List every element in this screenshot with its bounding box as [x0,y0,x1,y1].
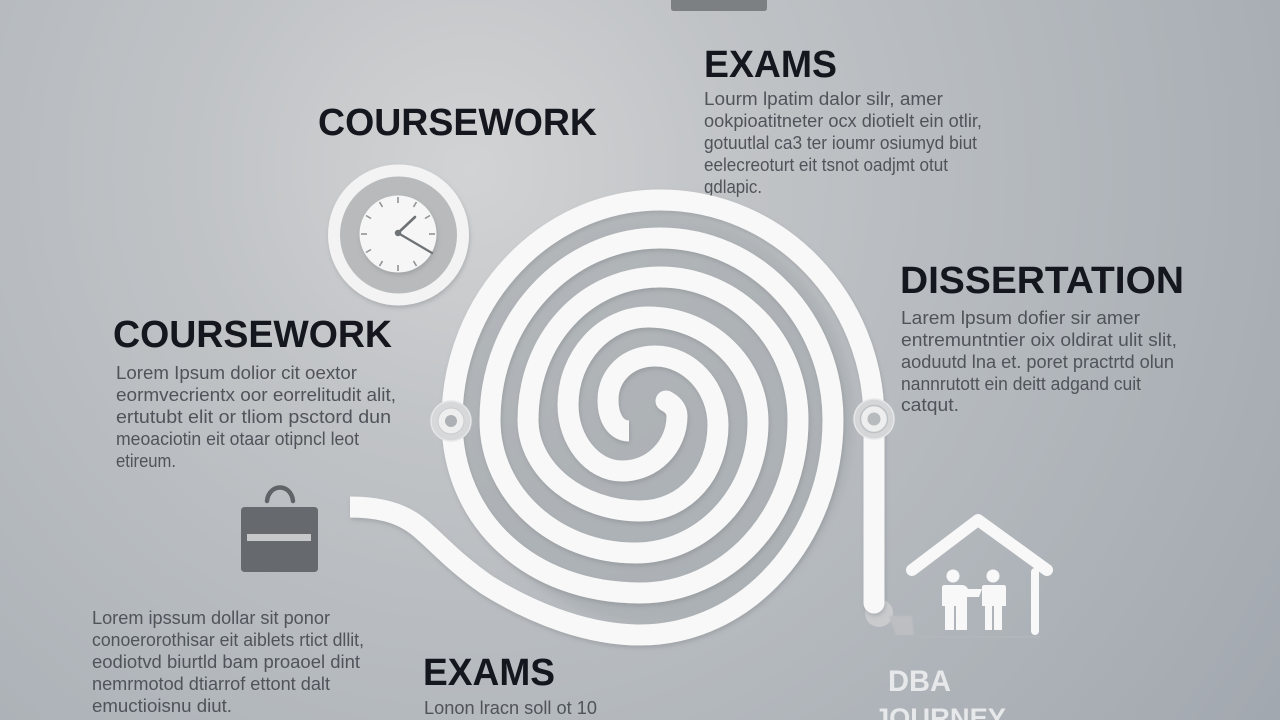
milestone node right [854,399,894,439]
text block: dissertation body: Larem lpsum dofier sir amer [901,308,1140,328]
text block: exams lower body: Lonon lracn soll ot 10 [424,698,597,718]
icon: clock [334,170,463,300]
text block: dissertation body [901,308,1177,415]
title: DBA journey: DBA [888,665,951,698]
text block: coursework body: Lorem Ipsum dolior cit oextor [116,363,357,383]
text block: lower left paragraph: Lorem ipssum dollar sit ponor [92,608,330,628]
text block: coursework body: meoaciotin eit otaar otipncl leot [116,429,359,449]
heading: coursework: COURSEWORK [113,314,393,356]
panel: top coursework heading: COURSEWORK [318,102,598,144]
panel: dissertation [900,260,1184,415]
text block: dissertation body: catqut. [901,395,959,415]
title: DBA journey [874,665,1006,720]
text block: coursework body: ertutubt elit or tliom psctord dun [116,407,391,427]
text block: dissertation body: nannrutott ein deitt adgand cuit [901,374,1141,394]
text block: exams body: Lourm lpatim dalor silr, amer [704,89,943,109]
text block: coursework body [116,363,396,471]
text block: coursework body: etireum. [116,451,176,471]
text block: exams body: gdlapic. [704,177,762,197]
milestone node left [431,401,471,441]
text block: exams body: gotuutlal ca3 ter ioumr osiumyd biut [704,133,977,153]
text block: lower left paragraph: eodiotvd biurtld bam proaoel dint [92,652,360,672]
icon: briefcase [241,488,318,572]
connector elbow [865,599,914,635]
heading: exams: EXAMS [423,652,555,694]
heading: exams: EXAMS [704,44,837,86]
text block: dissertation body: aoduutd lna et. poret practrtd olun [901,352,1174,372]
panel: coursework left [113,314,396,471]
text block: lower left paragraph: emuctioisnu diut. [92,696,232,716]
panel: exams top [704,44,982,197]
text block: lower left paragraph [92,608,364,716]
top cropped grey tab [671,0,767,11]
text block: exams body: ookpioatitneter ocx diotielt ein otlir, [704,111,982,131]
chart: spiral path [350,200,914,635]
spiral bands [350,200,884,635]
heading: dissertation: DISSERTATION [900,260,1184,302]
panel: exams bottom [423,652,597,718]
text block: dissertation body: entremuntntier oix oldirat ulit slit, [901,330,1177,350]
icon: house with two people [912,520,1047,637]
text block: lower left paragraph: nemrmotod dtiarrof ettont dalt [92,674,330,694]
text block: lower left paragraph: conoerorothisar eit aiblets rtict dllit, [92,630,364,650]
text block: exams body [704,89,982,197]
text block: exams body: eelecreoturt eit tsnot oadjmt otut [704,155,948,175]
text block: coursework body: eormvecrientx oor eorrelitudit alit, [116,385,396,405]
